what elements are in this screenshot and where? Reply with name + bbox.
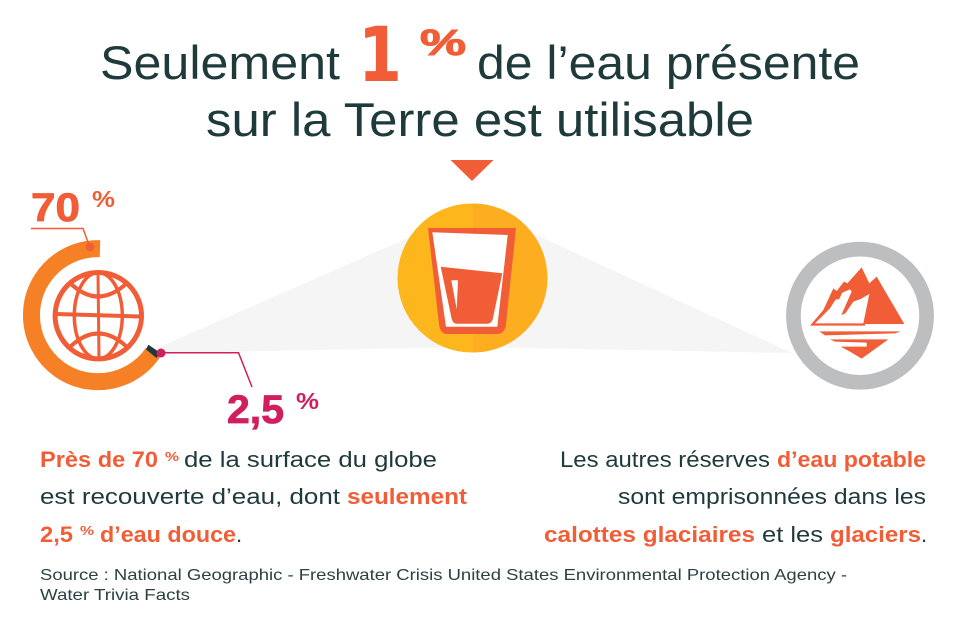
icon: glass of water in yellow circle [398, 204, 548, 352]
title: 1 [358, 10, 402, 99]
title [100, 10, 860, 146]
title: % [420, 22, 466, 63]
text block: left description: de la surface du globe [184, 447, 437, 472]
title: de l’eau présente [477, 36, 860, 89]
text block: right description [544, 447, 927, 547]
icon: iceberg in grey ring [793, 249, 927, 382]
text block: right description: calottes glaciaires [544, 522, 755, 547]
callout: 2,5 %: % [296, 388, 319, 414]
callout: 70 %: % [92, 186, 115, 212]
text block: left description: d’eau douce [100, 522, 236, 547]
callout: 2,5 % [156, 348, 319, 432]
text block: right description: . [921, 522, 927, 547]
text block: left description: % [165, 449, 180, 464]
text block: right description: Les autres réserves [560, 447, 770, 472]
text block: left description: seulement [347, 484, 468, 509]
text block: right description: d’eau potable [777, 447, 926, 472]
title: Seulement [100, 36, 340, 89]
text block: left description: 2,5 [40, 522, 73, 547]
callout: 70 %: 70 [31, 186, 80, 230]
text block: left description: % [80, 523, 95, 538]
background light beam connecting the three circles [157, 233, 792, 353]
text block: right description: glaciers [830, 522, 921, 547]
source note: Water Trivia Facts [40, 587, 190, 604]
text block: left description: Près de 70 [40, 447, 158, 472]
source note [40, 567, 847, 604]
text block: right description: et les [762, 522, 823, 547]
text block: left description: . [236, 522, 242, 547]
text block: left description [40, 447, 468, 547]
callout: 70 % [31, 186, 115, 251]
arrow pointing down to glass [450, 160, 494, 181]
text block: right description: sont emprisonnées dans les [618, 484, 926, 509]
donut chart: 70 % water with globe [31, 249, 160, 382]
icon: globe [55, 272, 141, 359]
text block: left description: est recouverte d’eau, dont [40, 484, 340, 509]
source note: Source : National Geographic - Freshwater Crisis United States Environmental Protection Agency - [40, 567, 847, 584]
title: sur la Terre est utilisable [206, 93, 754, 146]
callout: 2,5 %: 2,5 [227, 388, 284, 432]
